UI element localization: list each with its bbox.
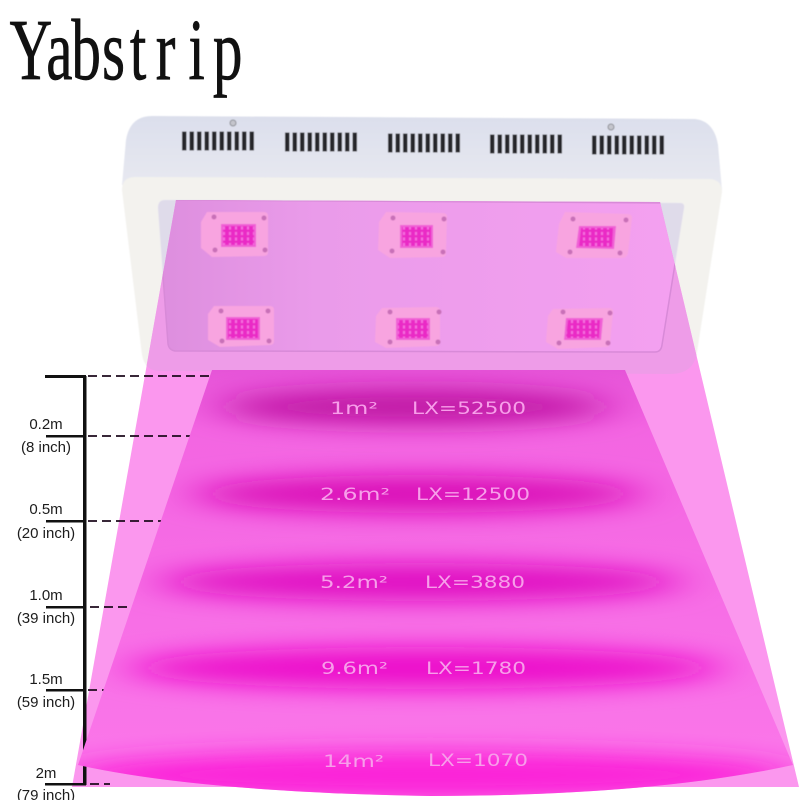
reading 0.5m: LX=12500	[416, 485, 530, 504]
LED module bottom left	[208, 306, 274, 347]
reading 0.2m: 1m²	[330, 399, 378, 418]
label 0.5m: 0.5m	[29, 501, 63, 518]
LED module top middle	[378, 212, 447, 258]
reading 1.5m: LX=1780	[426, 659, 526, 678]
label 2m	[17, 765, 75, 800]
label 1.5m: 1.5m	[29, 671, 63, 688]
inner beam base	[60, 370, 800, 800]
reading 1.0m: LX=3880	[425, 573, 525, 592]
grow light housing	[122, 116, 722, 374]
label 1.5m	[17, 671, 75, 711]
label 0.2m	[21, 416, 71, 456]
dashed guides	[88, 376, 212, 784]
reading 2m	[323, 751, 528, 771]
mounting screw left	[230, 120, 236, 126]
label 2m: 2m	[36, 765, 56, 782]
housing front face	[122, 177, 722, 374]
LED module bottom right	[546, 308, 613, 349]
label 1.5m: (59 inch)	[17, 694, 75, 711]
inner beam with intensity bands	[60, 370, 800, 800]
reading 0.2m	[330, 399, 526, 418]
band 1	[220, 389, 610, 425]
height scale	[17, 375, 212, 800]
band 4	[127, 647, 723, 689]
scale ticks	[45, 375, 86, 786]
LED modules	[201, 212, 632, 349]
band 5	[60, 751, 800, 799]
label 1.0m: (39 inch)	[17, 610, 75, 627]
beam over housing	[146, 200, 696, 374]
band 2	[193, 475, 643, 513]
band 3	[158, 563, 682, 601]
label 0.2m: 0.2m	[29, 416, 63, 433]
label 0.5m	[17, 501, 75, 542]
reading 1.0m: 5.2m²	[320, 573, 388, 592]
reading 1.0m	[320, 573, 525, 592]
label 1.0m: 1.0m	[29, 587, 63, 604]
vent slots	[182, 141, 665, 145]
scale axis	[83, 376, 86, 785]
reading 2m: 14m²	[323, 752, 384, 771]
reading 0.2m: LX=52500	[412, 399, 526, 418]
reading 2m: LX=1070	[428, 751, 528, 770]
LED module bottom middle	[375, 307, 442, 348]
title: Yabstrip	[10, 3, 242, 99]
reading 1.5m	[321, 659, 526, 678]
label 1.0m	[17, 587, 75, 627]
housing top face	[122, 116, 722, 190]
label 0.2m: (8 inch)	[21, 439, 71, 456]
lit panel	[158, 200, 684, 352]
LED module top right	[556, 212, 632, 258]
mounting screw right	[608, 124, 614, 130]
LED module top left	[201, 212, 268, 257]
reading 0.5m: 2.6m²	[320, 485, 390, 504]
label 0.5m: (20 inch)	[17, 525, 75, 542]
coverage readings	[320, 399, 530, 771]
reading 1.5m: 9.6m²	[321, 659, 388, 678]
light panel window recess	[158, 200, 684, 352]
reading 0.5m	[320, 485, 530, 504]
outer light beam	[72, 200, 799, 787]
